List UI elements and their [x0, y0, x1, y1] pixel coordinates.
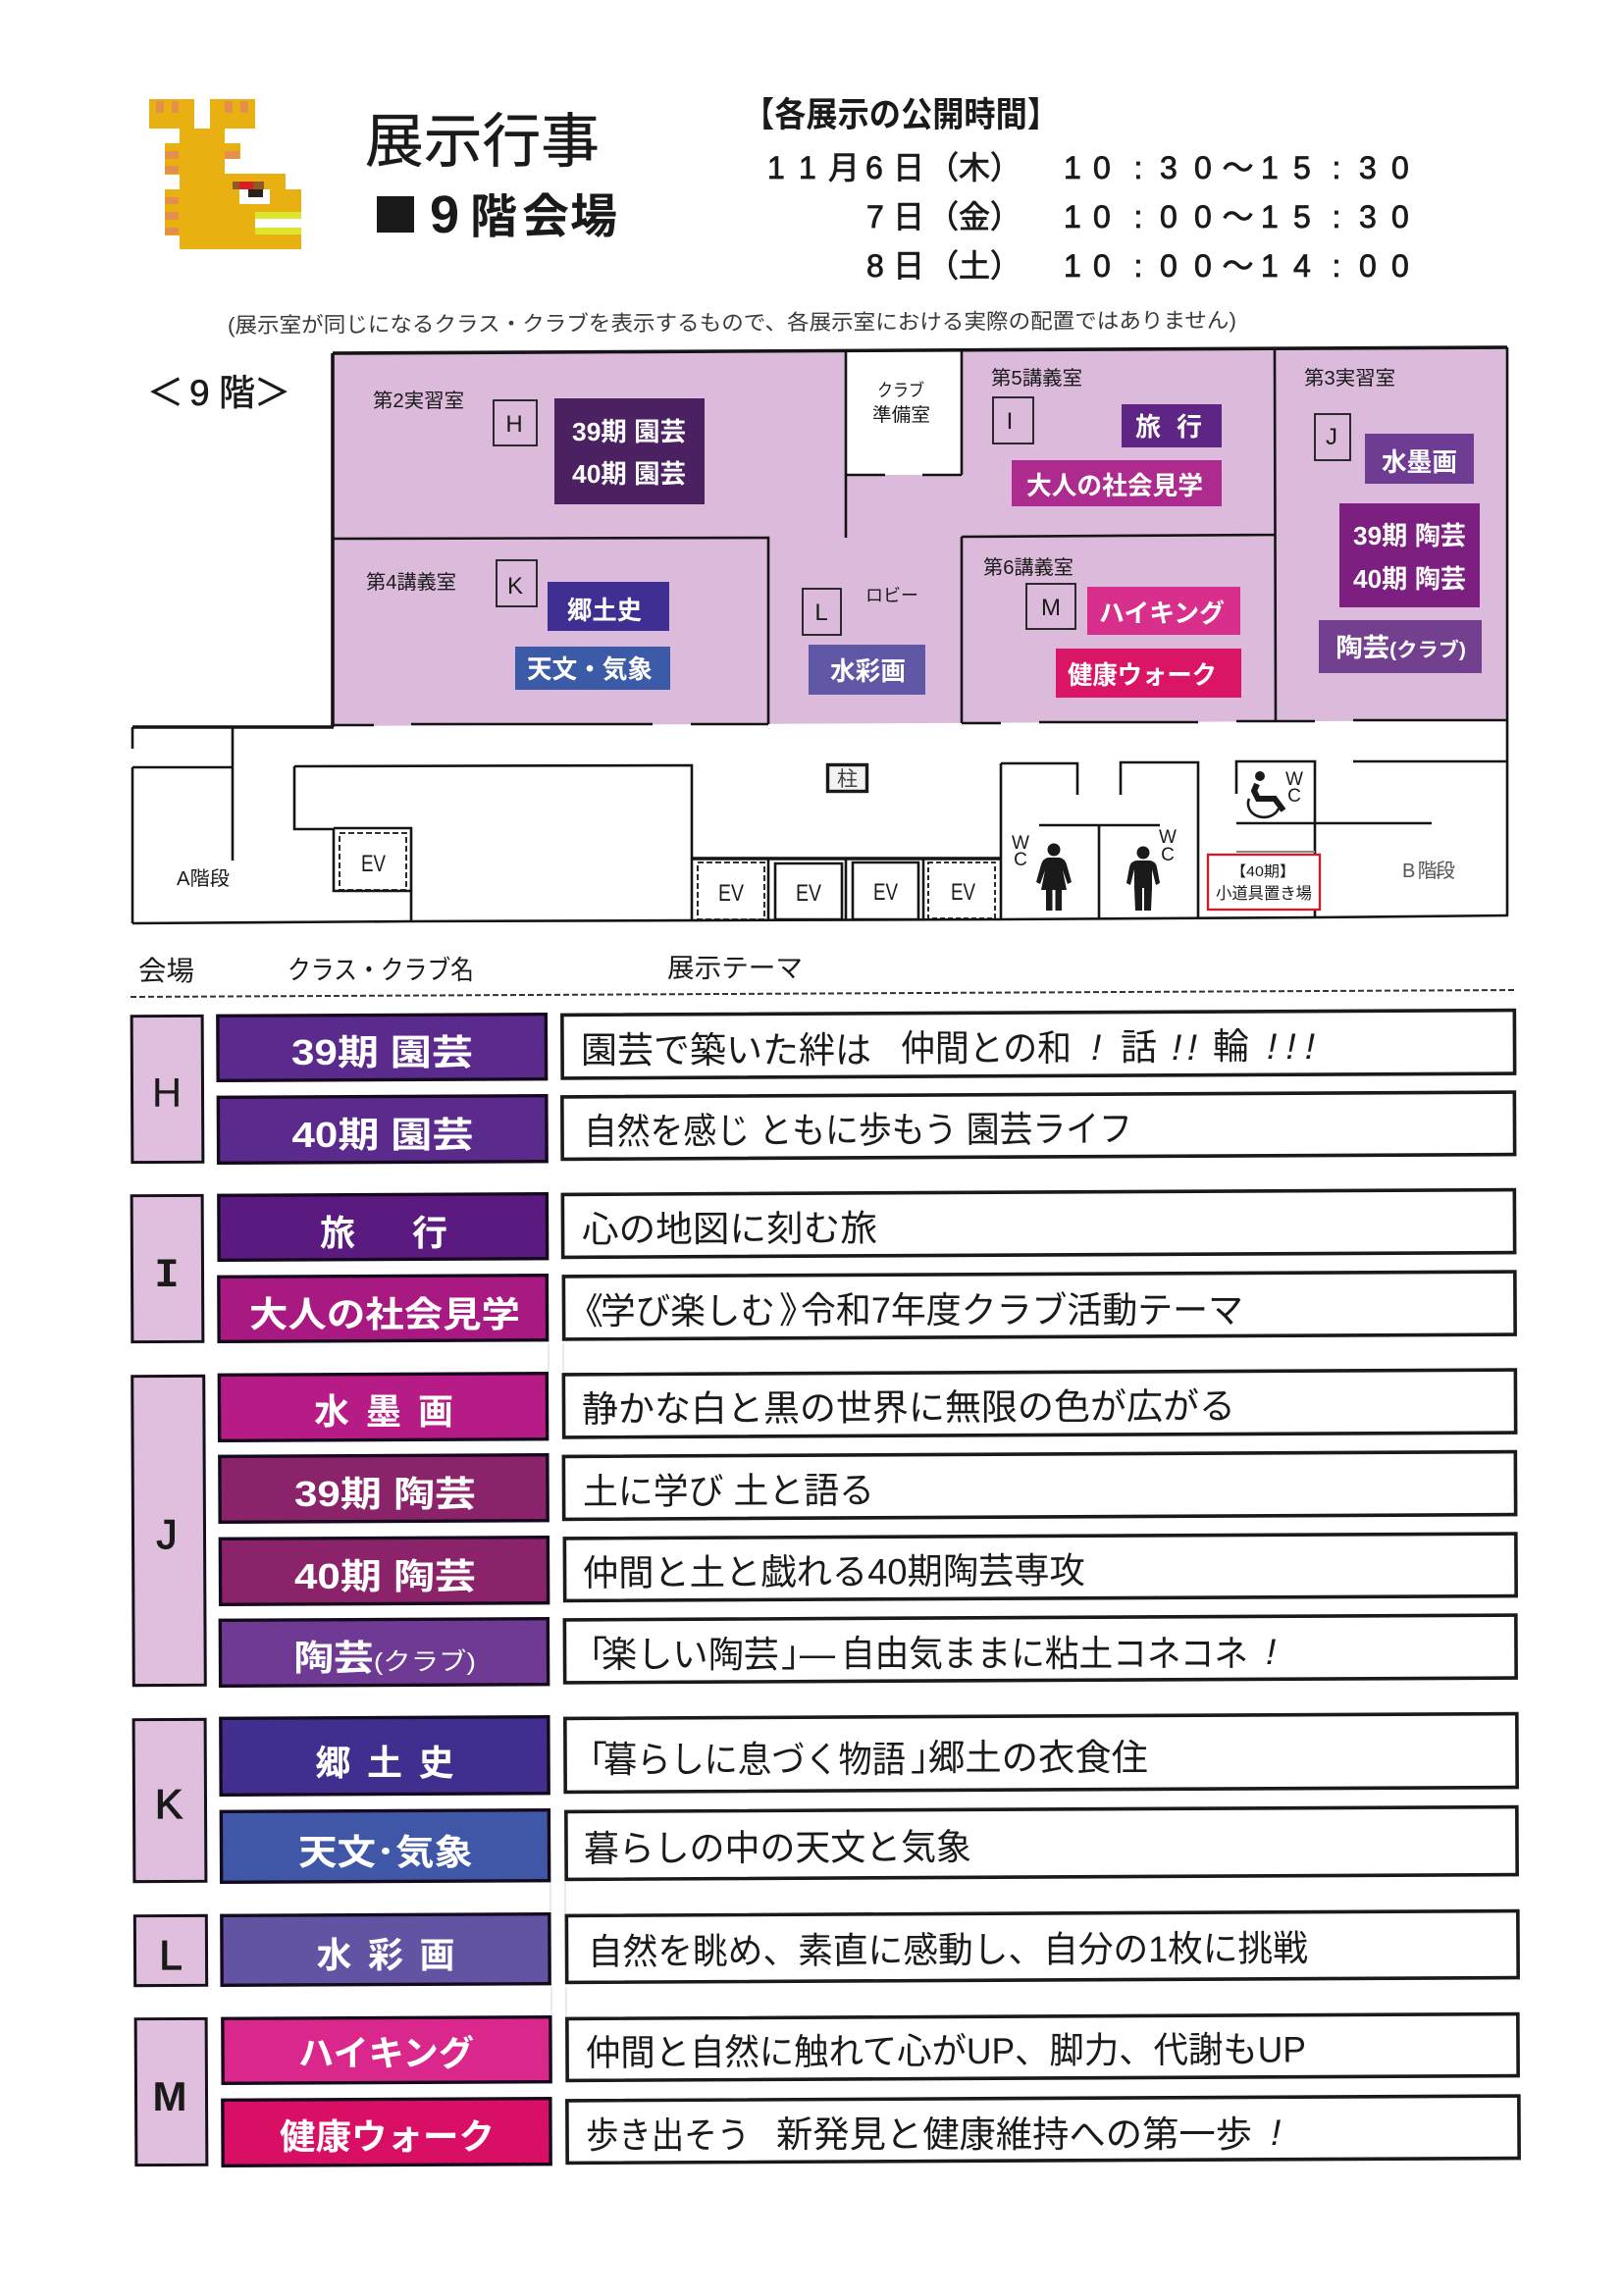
theme: astronomy and weather: 暮らしの中の天文と気象 — [584, 1827, 971, 1869]
class: watercolor — [222, 1914, 550, 1985]
venue cell H — [131, 1016, 203, 1163]
venue cell J: J — [157, 1511, 177, 1557]
group I — [131, 1190, 1515, 1342]
title: 展示行事 — [365, 109, 600, 175]
theme: 39th horticulture: 輪 — [1213, 1026, 1249, 1067]
theme: local history: 郷土の衣食住 — [928, 1738, 1148, 1778]
theme: local history — [565, 1714, 1517, 1792]
icon: women's restroom: C — [1014, 850, 1027, 870]
exhibit: travel: 旅 行 — [1135, 412, 1202, 442]
theme: watercolor — [566, 1911, 1518, 1982]
theme: 39th horticulture: 話 — [1121, 1027, 1157, 1068]
exhibit: pottery classes — [1339, 503, 1480, 607]
walls: lower corridor and core — [132, 727, 1508, 923]
label: stairs B: B 階段 — [1402, 860, 1455, 882]
group K — [133, 1714, 1517, 1882]
exhibit: adult social study — [1012, 460, 1222, 506]
subtitle: 9th floor venue: 階 — [470, 191, 517, 243]
exhibit: health walk — [1056, 649, 1241, 698]
panel: pink exhibition area — [333, 347, 1507, 726]
theme: 40th horticulture: 自然を感じ ともに歩もう 園芸ライフ — [584, 1109, 1132, 1152]
pillar: 柱 — [837, 768, 858, 791]
venue cell K: K — [155, 1781, 183, 1827]
subtitle: 9th floor venue — [377, 185, 617, 244]
venue marker J — [1315, 414, 1350, 460]
class: local history: 郷 土 史 — [316, 1743, 453, 1783]
class: travel — [219, 1194, 548, 1260]
class: watercolor: 水 彩 画 — [316, 1935, 455, 1975]
theme: pottery club: 」 — [781, 1634, 817, 1674]
exhibit: pottery club — [1319, 620, 1482, 673]
class: health walk: 健康ウォーク — [280, 2116, 495, 2157]
venue marker M — [1026, 584, 1075, 629]
group H — [131, 1011, 1515, 1163]
callout: props storage: 【40期】 — [1230, 863, 1295, 880]
theme: health walk: 歩き出そう — [586, 2115, 750, 2156]
theme: watercolor: 自然を眺め、素直に感動し、自分の1枚に挑戦 — [588, 1928, 1308, 1972]
class: astronomy and weather: 天文･気象 — [298, 1832, 473, 1872]
theme: pottery club: ! — [1266, 1632, 1276, 1672]
venue marker I — [993, 397, 1033, 444]
exhibit: adult social study: 大人の社会見学 — [1026, 471, 1203, 500]
theme: 40th pottery: 仲間と土と戯れる40期陶芸専攻 — [583, 1550, 1085, 1593]
subtitle: 9th floor venue: 9 — [430, 185, 459, 244]
icon: accessible restroom — [1248, 769, 1303, 817]
opening hours list: 7日（金） — [866, 199, 1021, 235]
elevator labels — [361, 851, 975, 907]
theme: 39th horticulture: ! — [1091, 1027, 1101, 1068]
walls: upper rooms — [333, 347, 1508, 915]
elevator labels: EV — [361, 851, 386, 877]
venue marker H — [494, 400, 537, 445]
exhibit: hiking: ハイキング — [1099, 599, 1225, 628]
class: 39th horticulture — [218, 1015, 547, 1080]
theme: pottery club: 「 — [571, 1635, 607, 1675]
class: health walk — [223, 2099, 550, 2166]
theme: astronomy and weather — [566, 1807, 1517, 1879]
exhibit: ink painting: 水墨画 — [1382, 447, 1457, 477]
venue marker K — [497, 560, 537, 606]
theme: 39th horticulture — [562, 1011, 1515, 1078]
label: stairs A: A階段 — [177, 867, 230, 890]
opening hours list: 10:00～14:00 — [1064, 248, 1409, 284]
table header: 展示テーマ — [667, 954, 803, 983]
heading: opening hours: 【各展示の公開時間】 — [743, 96, 1059, 134]
exhibit: astronomy and weather: 天文・気象 — [527, 654, 653, 684]
exhibit: watercolor: 水彩画 — [830, 656, 906, 686]
venue marker L — [803, 589, 841, 635]
venue marker M: M — [1041, 595, 1061, 621]
opening hours list — [767, 150, 1409, 284]
room: club preparation room: クラブ — [877, 380, 924, 400]
exhibit: horticulture: 40期 園芸 — [572, 459, 686, 489]
class: adult social study — [219, 1276, 548, 1341]
venue marker L: L — [814, 600, 828, 626]
class: ink painting — [219, 1374, 548, 1440]
venue cell L — [134, 1915, 207, 1986]
theme: 39th horticulture: !!! — [1267, 1026, 1315, 1067]
opening hours list: 11月6日（木） — [767, 150, 1021, 185]
venue cell K — [133, 1719, 206, 1882]
icon: women's restroom: W — [1012, 833, 1029, 854]
class: adult social study: 大人の社会見学 — [249, 1294, 520, 1334]
exhibit: travel — [1122, 404, 1222, 447]
venue cell M — [135, 2018, 207, 2166]
label: room 2 practice: 第2実習室 — [373, 390, 464, 412]
theme: health walk: 新発見と健康維持への第一歩 — [776, 2114, 1252, 2155]
subtitle: 9th floor venue: 場 — [570, 191, 617, 243]
theme: hiking: 仲間と自然に触れて心がUP、脚力、代謝もUP — [586, 2029, 1306, 2073]
theme: adult social study — [563, 1272, 1515, 1339]
icon: accessible restroom: W — [1285, 769, 1303, 790]
label: lecture room 4: 第4講義室 — [366, 571, 456, 594]
exhibit: horticulture: 39期 園芸 — [572, 417, 686, 446]
icon: men's restroom: C — [1161, 845, 1175, 865]
exhibit: watercolor — [809, 645, 925, 695]
theme: adult social study: 》 — [779, 1290, 815, 1331]
callout: props storage — [1208, 855, 1320, 910]
floor plan — [132, 347, 1508, 923]
theme: travel: 心の地図に刻む旅 — [582, 1208, 877, 1250]
elevator labels: EV — [951, 879, 975, 906]
room: club preparation room — [846, 350, 962, 538]
label: room 3 practice: 第3実習室 — [1304, 367, 1395, 390]
exhibit: local history: 郷土史 — [567, 596, 642, 625]
class: 40th pottery — [220, 1538, 549, 1604]
venue marker I: I — [1007, 408, 1013, 435]
exhibit: pottery club: 陶芸(クラブ) — [1335, 633, 1466, 662]
elevator labels: EV — [796, 880, 821, 907]
callout: props storage: 小道具置き場 — [1216, 884, 1312, 903]
class: hiking: ハイキング — [298, 2033, 474, 2073]
table header: 会場 — [138, 956, 194, 986]
class: 40th horticulture — [218, 1096, 547, 1163]
elevator labels: EV — [873, 879, 898, 906]
exhibit: astronomy and weather — [515, 647, 670, 690]
group J — [132, 1370, 1516, 1686]
label: lobby: ロビー — [865, 586, 918, 605]
venue marker H: H — [505, 411, 523, 438]
exhibit: horticulture — [554, 398, 705, 504]
exhibit: pottery classes: 39期 陶芸 — [1353, 521, 1466, 550]
room: club preparation room: 準備室 — [872, 404, 930, 426]
subtitle: 9th floor venue: 会 — [522, 191, 569, 243]
icon: men's restroom: W — [1159, 827, 1177, 848]
exhibit: pottery classes: 40期 陶芸 — [1353, 564, 1466, 594]
class: 39th pottery: 39期 陶芸 — [294, 1474, 476, 1514]
opening hours list: 10:30～15:30 — [1064, 150, 1409, 185]
class: 39th horticulture: 39期 園芸 — [291, 1032, 473, 1072]
theme: 39th horticulture: !! — [1172, 1027, 1197, 1068]
class: 40th horticulture: 40期 園芸 — [292, 1115, 473, 1155]
icon: accessible restroom: C — [1287, 786, 1301, 807]
venue marker J: J — [1326, 424, 1337, 450]
icon: pixel-art dragon mascot — [149, 99, 301, 249]
theme: hiking — [567, 2014, 1518, 2080]
class: 39th pottery — [220, 1455, 548, 1522]
theme: local history: 」 — [911, 1738, 947, 1778]
icon: men's restroom — [1126, 827, 1177, 911]
opening hours list: 10:00～15:30 — [1064, 199, 1409, 235]
theme: travel — [562, 1190, 1515, 1257]
venue cell H: H — [152, 1070, 182, 1116]
theme: pottery club — [564, 1615, 1516, 1683]
class: hiking — [223, 2017, 550, 2083]
theme: ink painting: 静かな白と黒の世界に無限の色が広がる — [582, 1386, 1235, 1430]
theme: adult social study: 令和7年度クラブ活動テーマ — [801, 1290, 1243, 1331]
theme: local history: 暮らしに息づく物語 — [603, 1740, 906, 1780]
icon: women's restroom — [1012, 833, 1072, 911]
exhibit: ink painting — [1365, 434, 1474, 484]
table header: クラス・クラブ名 — [288, 956, 474, 985]
elevator labels: EV — [718, 880, 744, 907]
theme: adult social study: 《 — [567, 1291, 603, 1331]
theme: 39th horticulture: 園芸で築いた絆は — [581, 1030, 871, 1070]
theme: 40th horticulture — [562, 1092, 1515, 1159]
class: 40th pottery: 40期 陶芸 — [294, 1556, 476, 1596]
theme: pottery club: 楽しい陶芸 — [602, 1635, 779, 1675]
label: lecture room 6: 第6講義室 — [983, 556, 1073, 579]
class: astronomy and weather — [221, 1810, 550, 1882]
theme: local history: 「 — [571, 1740, 607, 1780]
venue marker K: K — [507, 573, 523, 600]
opening hours list: 8日（土） — [866, 248, 1021, 284]
group M — [135, 2014, 1519, 2166]
venue cell I: I — [154, 1252, 180, 1299]
theme: health walk: ! — [1271, 2113, 1281, 2153]
theme: ink painting — [563, 1370, 1516, 1437]
theme: pottery club: 自由気ままに粘土コネコネ — [841, 1634, 1248, 1674]
theme: 39th pottery — [563, 1452, 1516, 1519]
class: ink painting: 水 墨 画 — [314, 1391, 453, 1432]
exhibit: hiking — [1087, 587, 1240, 635]
theme: 39th horticulture: 仲間との和 — [901, 1028, 1072, 1069]
exhibit: health walk: 健康ウォーク — [1068, 660, 1217, 690]
table header — [138, 954, 803, 986]
group L — [134, 1911, 1518, 1986]
label: lecture room 5: 第5講義室 — [991, 367, 1082, 390]
pillar — [828, 765, 867, 791]
exhibit: local history — [548, 582, 669, 631]
class: local history — [221, 1717, 549, 1795]
theme: adult social study: 学び楽しむ — [601, 1291, 775, 1331]
venue cell L: L — [159, 1932, 183, 1978]
class: pottery club — [220, 1619, 549, 1686]
theme: pottery club: ― — [800, 1634, 835, 1674]
class: travel: 旅 行 — [320, 1213, 447, 1253]
theme: 39th pottery: 土に学び 土と語る — [583, 1471, 874, 1512]
venue cell I — [131, 1195, 203, 1342]
theme: 40th pottery — [564, 1534, 1516, 1600]
theme: health walk — [567, 2096, 1519, 2163]
venue cell J — [132, 1376, 205, 1686]
floor label: ＜9階＞ — [147, 373, 290, 413]
note: layout caption: (展示室が同じになるクラス・クラブを表示するもので、各展示室における実際の配置ではありません) — [228, 308, 1236, 338]
venue cell M: M — [153, 2073, 186, 2119]
class: pottery club: 陶芸 (クラブ) — [293, 1638, 476, 1678]
